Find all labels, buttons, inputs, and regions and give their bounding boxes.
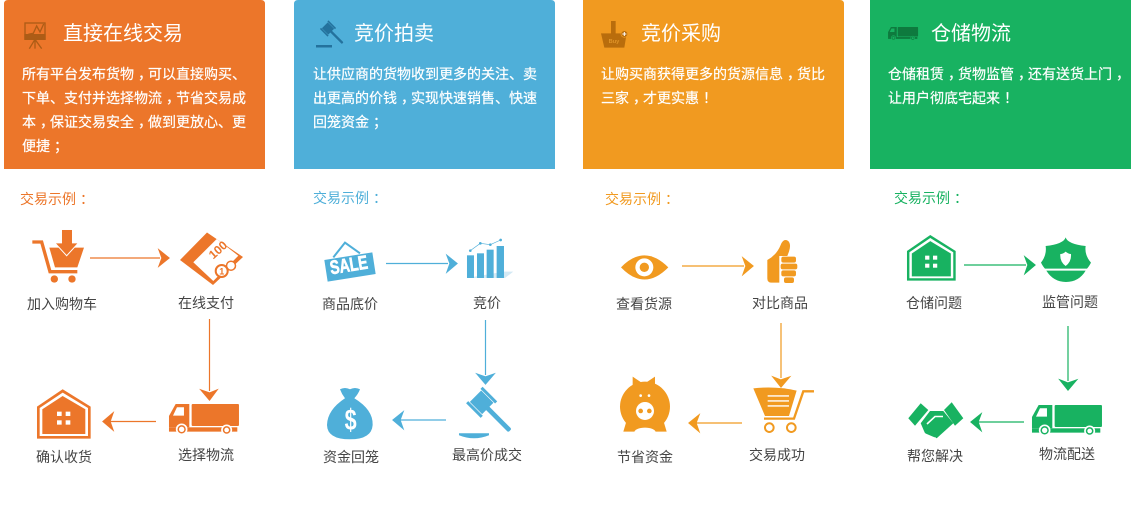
icon: house bbox=[37, 389, 91, 439]
label: 仓储问题 bbox=[906, 295, 962, 311]
arrow: down bbox=[477, 320, 494, 384]
heading: 竞价采购 bbox=[641, 22, 721, 45]
section: orange flow bbox=[20, 191, 243, 465]
panel: 直接在线交易 bbox=[4, 0, 265, 169]
icon: truck bbox=[888, 27, 918, 40]
text block: 所有平台发布货物 ，可以直接购买、 bbox=[22, 66, 246, 82]
arrow: right bbox=[90, 250, 169, 266]
panel: 仓储物流 bbox=[870, 0, 1131, 169]
label: 在线支付 bbox=[178, 295, 234, 311]
text block: 让购买商获得更多的货源信息 ，货比 bbox=[601, 66, 825, 82]
label: 对比商品 bbox=[752, 295, 808, 311]
icon: sale tag: SALE bbox=[328, 253, 369, 279]
text block bbox=[601, 66, 825, 106]
heading: 交易示例: 交易示例 ： bbox=[605, 191, 679, 207]
label: 商品底价 bbox=[322, 296, 378, 312]
icon: gavel bbox=[459, 387, 518, 439]
icon: money bag: $ bbox=[345, 404, 357, 437]
label: 节省资金 bbox=[617, 449, 673, 465]
heading: 交易示例: 交易示例 ： bbox=[313, 190, 387, 206]
panel: 竞价采购 bbox=[583, 0, 844, 169]
icon: truck bbox=[169, 404, 239, 435]
text block: 便捷 ； bbox=[22, 138, 68, 155]
text block: 让供应商的货物收到更多的关注、卖 bbox=[313, 66, 537, 82]
arrow: left bbox=[971, 414, 1024, 430]
label: 监管问题 bbox=[1042, 294, 1098, 310]
icon: handshake bbox=[908, 402, 963, 438]
arrow: left bbox=[393, 412, 446, 428]
icon: money bag bbox=[327, 388, 373, 439]
text block bbox=[313, 66, 537, 131]
icon: truck bbox=[1032, 405, 1102, 436]
heading: 仓储物流 bbox=[931, 22, 1011, 45]
section: green flow bbox=[894, 190, 1102, 464]
text block bbox=[22, 66, 246, 155]
icon: piggy bank bbox=[620, 377, 670, 437]
icon: shopping cart bbox=[753, 388, 814, 432]
panel: 竞价拍卖 bbox=[294, 0, 555, 169]
icon: online payment: 1 bbox=[219, 266, 224, 276]
icon: buy basket: Buy bbox=[609, 39, 620, 45]
icon: bar chart bbox=[467, 239, 513, 278]
heading: 直接在线交易 bbox=[63, 22, 183, 45]
icon: gavel bbox=[316, 20, 347, 48]
icon: buy basket bbox=[601, 21, 628, 48]
icon: sale tag bbox=[324, 243, 376, 282]
arrow: right bbox=[964, 257, 1035, 274]
label: 查看货源 bbox=[616, 296, 672, 312]
icon: warehouse bbox=[907, 235, 956, 281]
text block: 下单、支付并选择物流 ，节省交易成 bbox=[22, 90, 246, 106]
label: 交易成功 bbox=[749, 447, 805, 463]
label: 竞价 bbox=[473, 295, 501, 311]
heading: 交易示例: 交易示例 ： bbox=[894, 190, 968, 206]
label: 确认收货 bbox=[36, 449, 92, 465]
icon: online payment: 100 bbox=[206, 238, 230, 262]
icon: badge shield bbox=[1041, 237, 1091, 282]
arrow: down bbox=[1060, 326, 1076, 390]
text block: 仓储租赁 ，货物监管 ，还有送货上门 ， bbox=[888, 66, 1130, 82]
icon: add to cart bbox=[32, 230, 84, 283]
text block: 本 ，保证交易安全 ，做到更放心、更 bbox=[22, 114, 246, 130]
heading: 竞价拍卖 bbox=[354, 22, 434, 45]
label: 资金回笼 bbox=[323, 449, 379, 465]
icon: presentation board bbox=[25, 23, 45, 49]
arrow: down bbox=[773, 323, 790, 387]
text block: 让用户彻底宅起来 ！ bbox=[888, 90, 1018, 106]
section: blue flow bbox=[313, 190, 522, 465]
arrow: right bbox=[386, 256, 457, 272]
icon: online payment bbox=[180, 232, 243, 285]
arrow: down bbox=[201, 319, 217, 400]
arrow: left bbox=[689, 415, 742, 432]
text block bbox=[888, 66, 1130, 106]
text block: 出更高的价钱 ，实现快速销售、快速 bbox=[313, 90, 537, 106]
section: yellow flow bbox=[605, 191, 814, 465]
arrow: left bbox=[103, 413, 156, 430]
icon: thumbs up bbox=[767, 240, 797, 283]
arrow: right bbox=[682, 258, 753, 274]
label: 物流配送 bbox=[1039, 446, 1095, 462]
label: 最高价成交 bbox=[452, 447, 522, 463]
label: 加入购物车 bbox=[27, 296, 97, 312]
label: 选择物流 bbox=[178, 447, 234, 463]
icon: eye bbox=[621, 255, 668, 279]
text block: 回笼资金 ； bbox=[313, 114, 387, 131]
text block: 三家 ，才更实惠 ！ bbox=[601, 90, 717, 106]
heading: 交易示例: 交易示例 ： bbox=[20, 191, 94, 207]
label: 帮您解决 bbox=[907, 448, 963, 464]
